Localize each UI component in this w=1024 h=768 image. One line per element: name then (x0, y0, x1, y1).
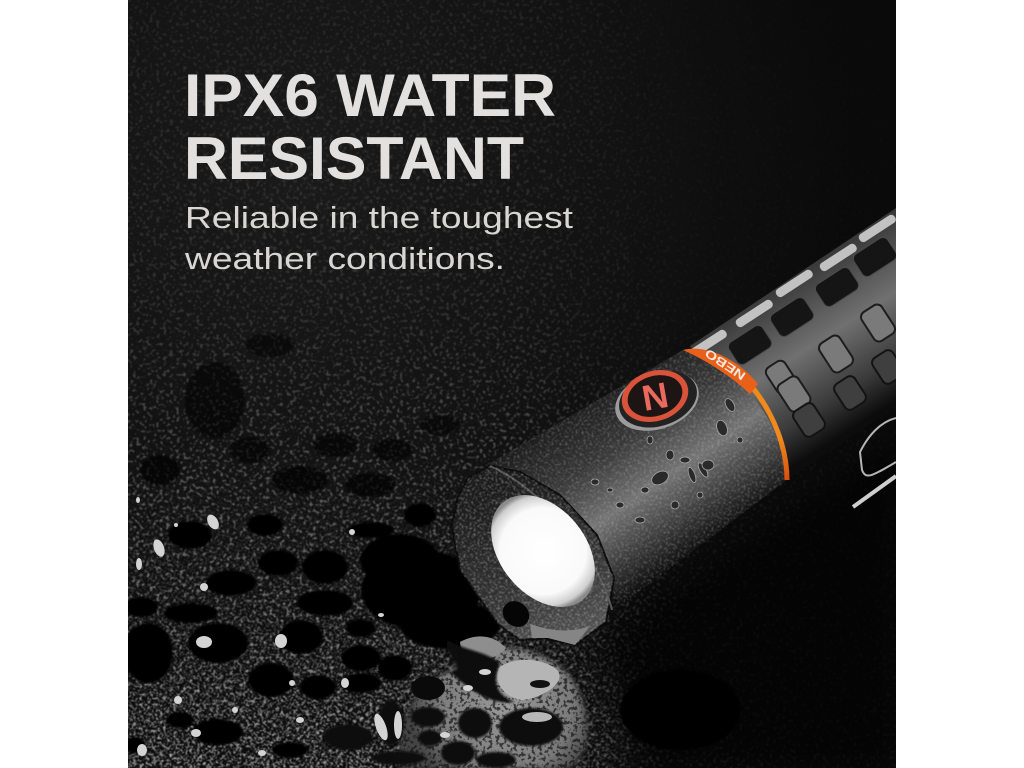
orange NEBO ring (683, 346, 787, 480)
puddle dark drops (323, 700, 563, 768)
puddle: light reflection on water (398, 636, 593, 768)
middle grip blocks (764, 302, 897, 414)
flashlight head bezel (452, 466, 617, 646)
heading: RESISTANT (184, 125, 524, 192)
heading (184, 62, 556, 192)
flashlight (452, 208, 906, 646)
lower grip blocks (792, 349, 896, 438)
heading: IPX6 WATER (184, 62, 556, 129)
dark water pools (123, 333, 740, 758)
power button with N logo (615, 370, 699, 431)
infographic: waterproof flashlight on wet surface (128, 0, 896, 768)
subheading: weather conditions. (184, 241, 505, 276)
barrel water droplets (490, 350, 786, 606)
subheading: Reliable in the toughest (185, 200, 573, 235)
flashlight handle with grip blocks (688, 208, 906, 478)
belt clip outline (853, 418, 896, 507)
photo background: wet black surface (123, 0, 906, 768)
power button with N logo: N (639, 374, 671, 419)
shadow beneath flashlight (594, 477, 890, 768)
silver grip strips (688, 213, 897, 359)
lens glowing white (491, 495, 595, 607)
flashlight barrel (490, 350, 787, 606)
subheading (184, 200, 573, 276)
dark upper grip blocks (726, 235, 899, 367)
water glints (136, 497, 552, 756)
brand text: NEBO (702, 346, 748, 383)
